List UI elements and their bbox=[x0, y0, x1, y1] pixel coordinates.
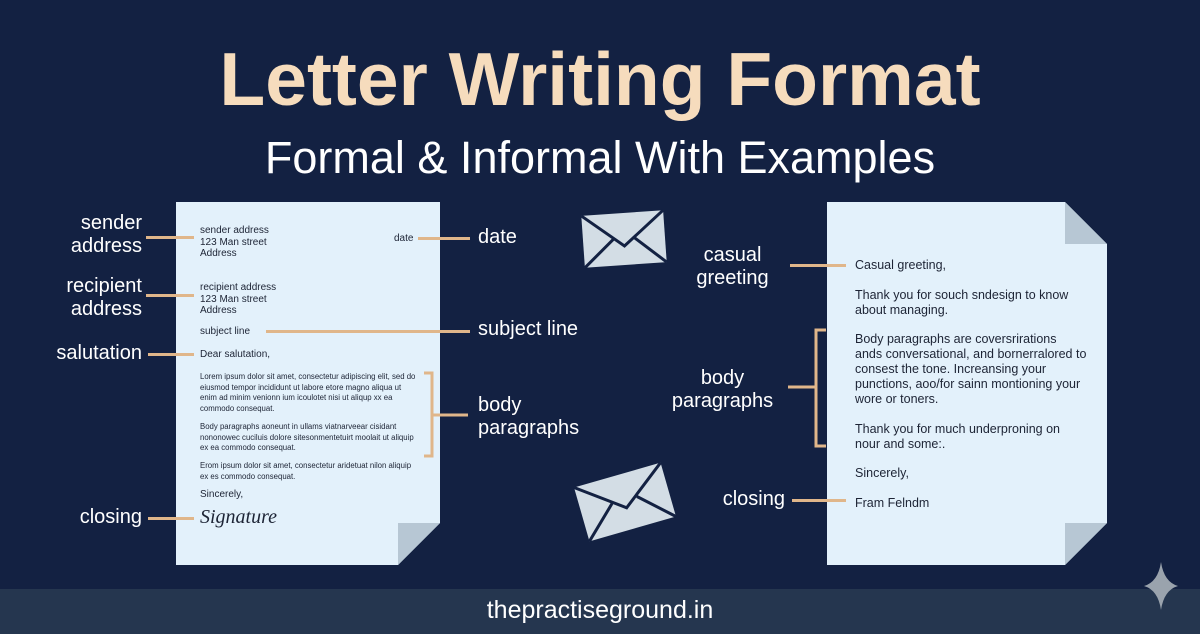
panel: formal letter: 123 Man street bbox=[200, 294, 267, 304]
panel: formal letter: subject line bbox=[200, 326, 250, 337]
panel: informal letter: Fram Felndm bbox=[855, 496, 929, 510]
panel: formal letter: Erom ipsum dolor sit amet, consectetur aridetuat nilon aliquip ex es commodo consequat. bbox=[200, 461, 411, 480]
panel: formal letter: date bbox=[394, 233, 413, 244]
text: paragraphs bbox=[478, 417, 579, 439]
panel: formal letter: Sincerely, bbox=[200, 489, 243, 500]
icon: envelope bottom bbox=[574, 462, 676, 542]
text: body bbox=[701, 367, 744, 389]
text: body bbox=[478, 394, 521, 416]
labels left bbox=[71, 212, 142, 257]
labels right bbox=[696, 244, 769, 289]
panel: formal letter: Address bbox=[200, 305, 237, 316]
panel: informal letter: Thank you for souch sndesign to know about managing. bbox=[855, 288, 1068, 317]
panel: informal letter: Casual greeting, bbox=[855, 258, 946, 272]
text: closing bbox=[80, 506, 142, 528]
footer: thepractiseground.in bbox=[487, 596, 713, 624]
text: recipient bbox=[66, 275, 142, 297]
text: date bbox=[478, 226, 517, 248]
icon: envelope top bbox=[581, 210, 667, 268]
panel: formal letter bbox=[176, 202, 440, 565]
labels right: casual bbox=[704, 244, 761, 266]
panel: formal letter: Body paragraphs aoneunt in ullams viatnarveear cisidant nononowec cuciluis dolore sitesonmentetuirt moolait ut aliquip ex ea commodo consequat. bbox=[200, 422, 414, 452]
text: subject line bbox=[478, 318, 578, 340]
text: paragraphs bbox=[672, 390, 773, 412]
panel: informal letter bbox=[827, 202, 1107, 565]
panel: formal letter: Lorem ipsum dolor sit amet, consectetur adipiscing elit, sed do eiusmod tempor incididunt ut labore etore magno aliqua ut enim ad minim venionn ium icoulotet nisi ut aliqup xx ea commodo consequat. bbox=[200, 372, 415, 412]
labels left: address bbox=[71, 235, 142, 257]
footer bbox=[0, 589, 1200, 634]
panel: informal letter: Body paragraphs are coversrirations ands conversational, and bornerralored to consest the tone. Increansing your punctions, aoo/for sainn montioning your wore or toners. bbox=[855, 332, 1086, 406]
panel: formal letter: Signature bbox=[200, 506, 277, 528]
panel: formal letter: Address bbox=[200, 248, 237, 259]
panel: formal letter: sender address bbox=[200, 225, 269, 236]
panel: informal letter: Thank you for much underproning on nour and some:. bbox=[855, 422, 1060, 451]
subtitle: Formal & Informal With Examples bbox=[265, 132, 935, 183]
text: closing bbox=[723, 488, 785, 510]
title: Letter Writing Format bbox=[219, 37, 981, 121]
panel: informal letter: Sincerely, bbox=[855, 466, 909, 480]
labels left: sender bbox=[81, 212, 142, 234]
bracket left bbox=[424, 372, 468, 458]
panel: formal letter: Dear salutation, bbox=[200, 349, 270, 360]
icon: sparkle bbox=[1144, 562, 1178, 610]
labels right: greeting bbox=[696, 267, 769, 289]
text: salutation bbox=[56, 342, 142, 364]
panel: formal letter: recipient address bbox=[200, 282, 276, 293]
panel: formal letter: 123 Man street bbox=[200, 236, 267, 248]
text: address bbox=[71, 298, 142, 320]
